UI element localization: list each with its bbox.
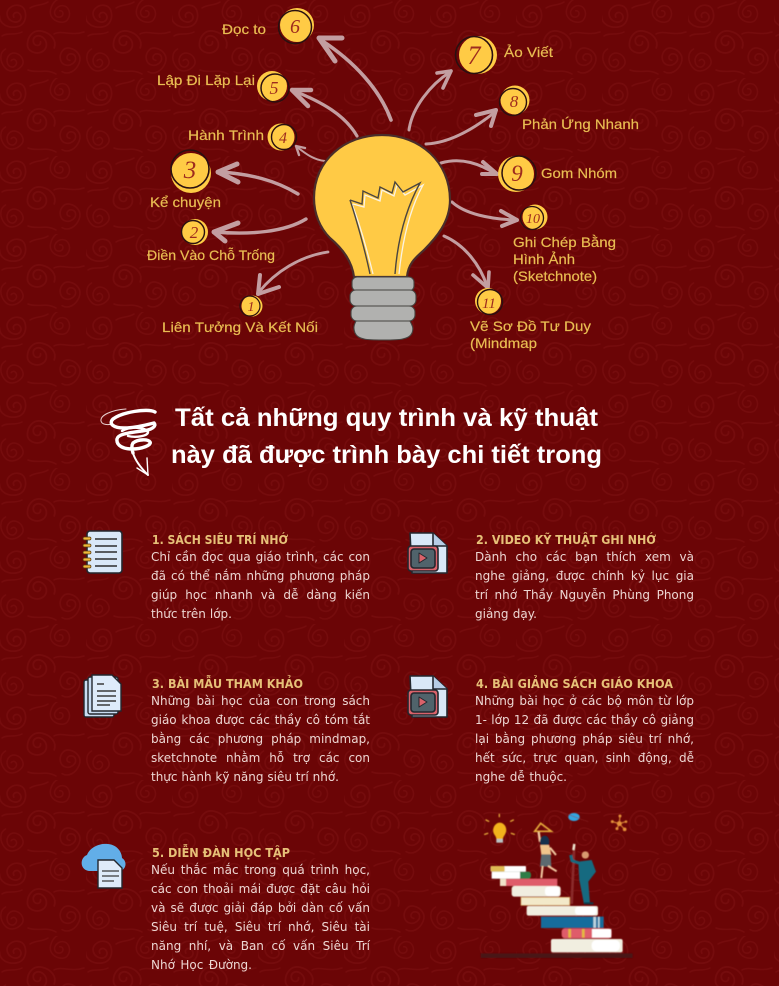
card 3 body: sketchnote nhằm hỗ trợ các con <box>151 751 370 765</box>
card 5 body: và sẽ được giải đáp bởi dàn cố vấn <box>151 901 370 915</box>
card 3 body: bằng các phương pháp mindmap, <box>151 732 370 746</box>
card 2: video kỹ thuật ghi nhớ <box>475 532 694 621</box>
badge 6 <box>278 8 314 44</box>
card 2 body: Dành cho các bạn thích xem và <box>475 550 694 564</box>
card 2 body: giảng dạy. <box>475 607 537 621</box>
badge 10: 10 <box>526 212 540 227</box>
label 11: (Mindmap <box>470 335 537 351</box>
icon: cloud document <box>82 844 126 888</box>
label 3: Kể chuyện <box>150 194 221 210</box>
heading: Tất cả những quy trình và kỹ thuật <box>175 404 599 432</box>
badge 7 <box>456 36 497 74</box>
card 5 body: Siêu trí tuệ, Siêu trí nhớ, Siêu tài <box>151 920 370 934</box>
molecule <box>611 815 627 831</box>
label 10: (Sketchnote) <box>513 268 597 284</box>
card 1: sách siêu trí nhớ <box>151 532 370 621</box>
card 4 body: lại bằng phương pháp siêu trí nhớ, <box>475 732 694 746</box>
icon: video file 4 <box>408 676 447 717</box>
card 2 body: nghe giảng, được chính kỷ lục gia <box>475 569 694 583</box>
label 4: Hành Trình <box>188 127 264 143</box>
book stack <box>491 866 623 952</box>
arrow to 7 <box>409 71 451 130</box>
badge 11: 11 <box>482 296 496 312</box>
badge 9 <box>498 156 536 192</box>
badge 10 <box>520 204 548 230</box>
label 11: Vẽ Sơ Đồ Tư Duy <box>470 318 591 334</box>
filament <box>350 182 423 274</box>
badge 4 <box>268 124 296 150</box>
badge 6: 6 <box>290 16 300 38</box>
badge 4: 4 <box>279 130 287 147</box>
card 4 title: 4. BÀI GIẢNG SÁCH GIÁO KHOA <box>476 675 674 691</box>
arrow to 6 <box>319 38 391 120</box>
card 1 body: đã có thể nắm những phương pháp <box>151 569 370 583</box>
lightbulb small <box>485 814 514 843</box>
bulb glass <box>314 135 450 277</box>
label 1: Liên Tưởng Và Kết Nối <box>162 319 318 335</box>
heading: này đã được trình bày chi tiết trong <box>171 441 602 469</box>
card 2 title: 2. VIDEO KỸ THUẬT GHI NHỚ <box>476 532 656 547</box>
icon: document stack <box>84 675 121 717</box>
woman <box>535 823 557 878</box>
card 5 body: năng nhí, và Ban cố vấn Siêu Trí <box>151 939 370 953</box>
card 3: bài mẫu tham khảo <box>151 675 370 784</box>
card 1 body: Chỉ cần đọc qua giáo trình, các con <box>151 550 370 564</box>
badge 8 <box>500 86 530 116</box>
badge 1 <box>240 296 262 316</box>
card 5 title: 5. DIỄN ĐÀN HỌC TẬP <box>152 844 290 860</box>
arrows radiating from bulb <box>214 38 517 294</box>
badge 5 <box>257 71 289 102</box>
label 10: Hình Ảnh <box>513 251 575 267</box>
label 2: Điền Vào Chỗ Trống <box>147 247 275 263</box>
screw base <box>350 277 416 340</box>
label 9: Gom Nhóm <box>541 165 617 181</box>
arrow to 3 <box>218 164 298 194</box>
illustration: people climbing stacked books <box>481 812 633 958</box>
card 2 body: trí nhớ Thầy Nguyễn Phùng Phong <box>475 588 694 602</box>
heading <box>171 404 602 469</box>
card 3 title: 3. BÀI MẪU THAM KHẢO <box>152 675 303 691</box>
card 1 title: 1. SÁCH SIÊU TRÍ NHỚ <box>152 532 288 547</box>
card 3 body: giáo khoa được các thầy cô tóm tắt <box>151 713 370 727</box>
badge 2 <box>182 219 208 245</box>
badge 3 <box>171 150 211 193</box>
badge 11 <box>475 288 502 314</box>
badge 9: 9 <box>511 161 523 186</box>
card 4 body: nghe dễ thuộc. <box>475 770 567 784</box>
label 11 <box>470 318 591 351</box>
badge 5: 5 <box>270 78 278 98</box>
card 2 body <box>475 550 694 621</box>
arrow to 10 <box>452 202 517 226</box>
card 5 body: Nhớ Học Đường. <box>151 958 252 972</box>
label 10: Ghi Chép Bằng <box>513 234 616 250</box>
icon: video file 2 <box>408 533 447 573</box>
arrow to 9 <box>441 161 497 174</box>
card 4 body: 1- lớp 12 đã được các thầy cô giảng <box>475 713 694 727</box>
light bulb <box>314 135 450 340</box>
planet <box>561 812 588 822</box>
card 3 body: thực hành kỹ năng siêu trí nhớ. <box>151 770 339 784</box>
card 5 body <box>151 862 370 972</box>
card 5: diễn đàn học tập <box>151 844 370 972</box>
label 7: Ảo Viết <box>504 44 553 60</box>
card 1 body: giúp học nhanh và dễ dàng kiến <box>151 588 370 602</box>
card 1 body <box>151 550 370 621</box>
floor <box>481 953 633 958</box>
icon: notebook <box>83 531 122 573</box>
man with pencil <box>571 844 596 904</box>
label 6: Đọc to <box>222 21 266 37</box>
label 10 <box>513 234 616 284</box>
card 4 body: Những bài học ở các bộ môn từ lớp <box>475 694 694 708</box>
label 8: Phản Ứng Nhanh <box>522 116 639 132</box>
card 3 body <box>151 694 370 784</box>
badge 8: 8 <box>510 92 519 111</box>
card 4: bài giảng sách giáo khoa <box>475 675 694 784</box>
card 1 body: thức trên lớp. <box>151 607 232 621</box>
arrow to 1 <box>258 252 328 294</box>
card 3 body: Những bài học của con trong sách <box>151 694 370 708</box>
badge 2: 2 <box>190 223 199 242</box>
arrow to 11 <box>444 236 489 288</box>
arrow to 8 <box>426 110 496 144</box>
label 5: Lập Đi Lặp Lại <box>157 72 255 88</box>
badge 7: 7 <box>468 41 482 70</box>
badge 1: 1 <box>248 300 254 315</box>
arrow to 5 <box>292 90 357 136</box>
card 4 body <box>475 694 694 784</box>
icon: swirl arrow <box>101 409 155 475</box>
card 5 body: các con thoải mái được đặt câu hỏi <box>151 882 370 896</box>
badge 3: 3 <box>183 157 196 184</box>
technique labels <box>147 21 639 351</box>
card 4 body: hết sức, trực quan, sinh động, dễ <box>475 751 694 765</box>
arrow to 2 <box>214 219 306 241</box>
arrow to 4 <box>296 146 325 161</box>
card 5 body: Nếu thắc mắc trong quá trình học, <box>151 863 370 877</box>
